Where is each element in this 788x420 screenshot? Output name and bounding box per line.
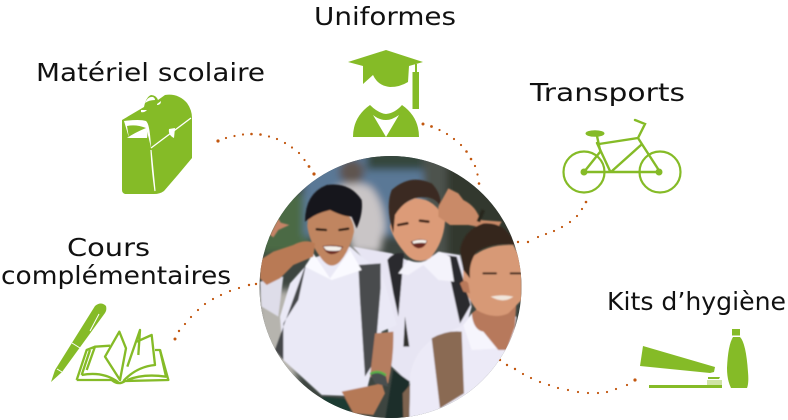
icon: school satchel bbox=[122, 95, 192, 194]
dotted connector: graduate to photo bbox=[422, 122, 480, 185]
title: Uniformes: Uniformes bbox=[314, 2, 456, 31]
dotted connector: book to photo bbox=[174, 283, 257, 340]
arm around shoulders bbox=[260, 241, 315, 285]
icon: bicycle bbox=[564, 120, 680, 192]
title: Cours complémentaires bbox=[1, 233, 231, 290]
head bbox=[390, 198, 445, 261]
title: Cours complémentaires: complémentaires bbox=[1, 261, 231, 290]
title: Kits d'hygiène: Kits d’hygiène bbox=[607, 287, 786, 316]
raised hand bbox=[438, 188, 502, 230]
three boys bbox=[260, 180, 522, 420]
dotted connector: hygiene kit to photo bbox=[499, 359, 637, 394]
dotted connector: satchel to photo bbox=[216, 133, 316, 176]
boy in the foreground bbox=[403, 223, 522, 420]
title: Transports: Transports bbox=[529, 78, 685, 107]
head bbox=[463, 245, 522, 316]
boy on the right behind: body bbox=[353, 180, 502, 420]
boy on the left: body bbox=[260, 184, 397, 415]
icon: pen and open book bbox=[51, 304, 168, 383]
dotted connector: bicycle to photo bbox=[517, 201, 587, 243]
head bbox=[307, 208, 354, 266]
title: Cours complémentaires: Cours bbox=[67, 233, 150, 262]
icon: graduate with cap bbox=[348, 50, 423, 137]
title: Matériel scolaire: Matériel scolaire bbox=[36, 58, 265, 87]
photo background bbox=[250, 150, 530, 420]
photo: three smiling schoolboys in a circle bbox=[250, 150, 530, 420]
icon: toothpaste, toothbrush and bottle bbox=[640, 329, 748, 388]
